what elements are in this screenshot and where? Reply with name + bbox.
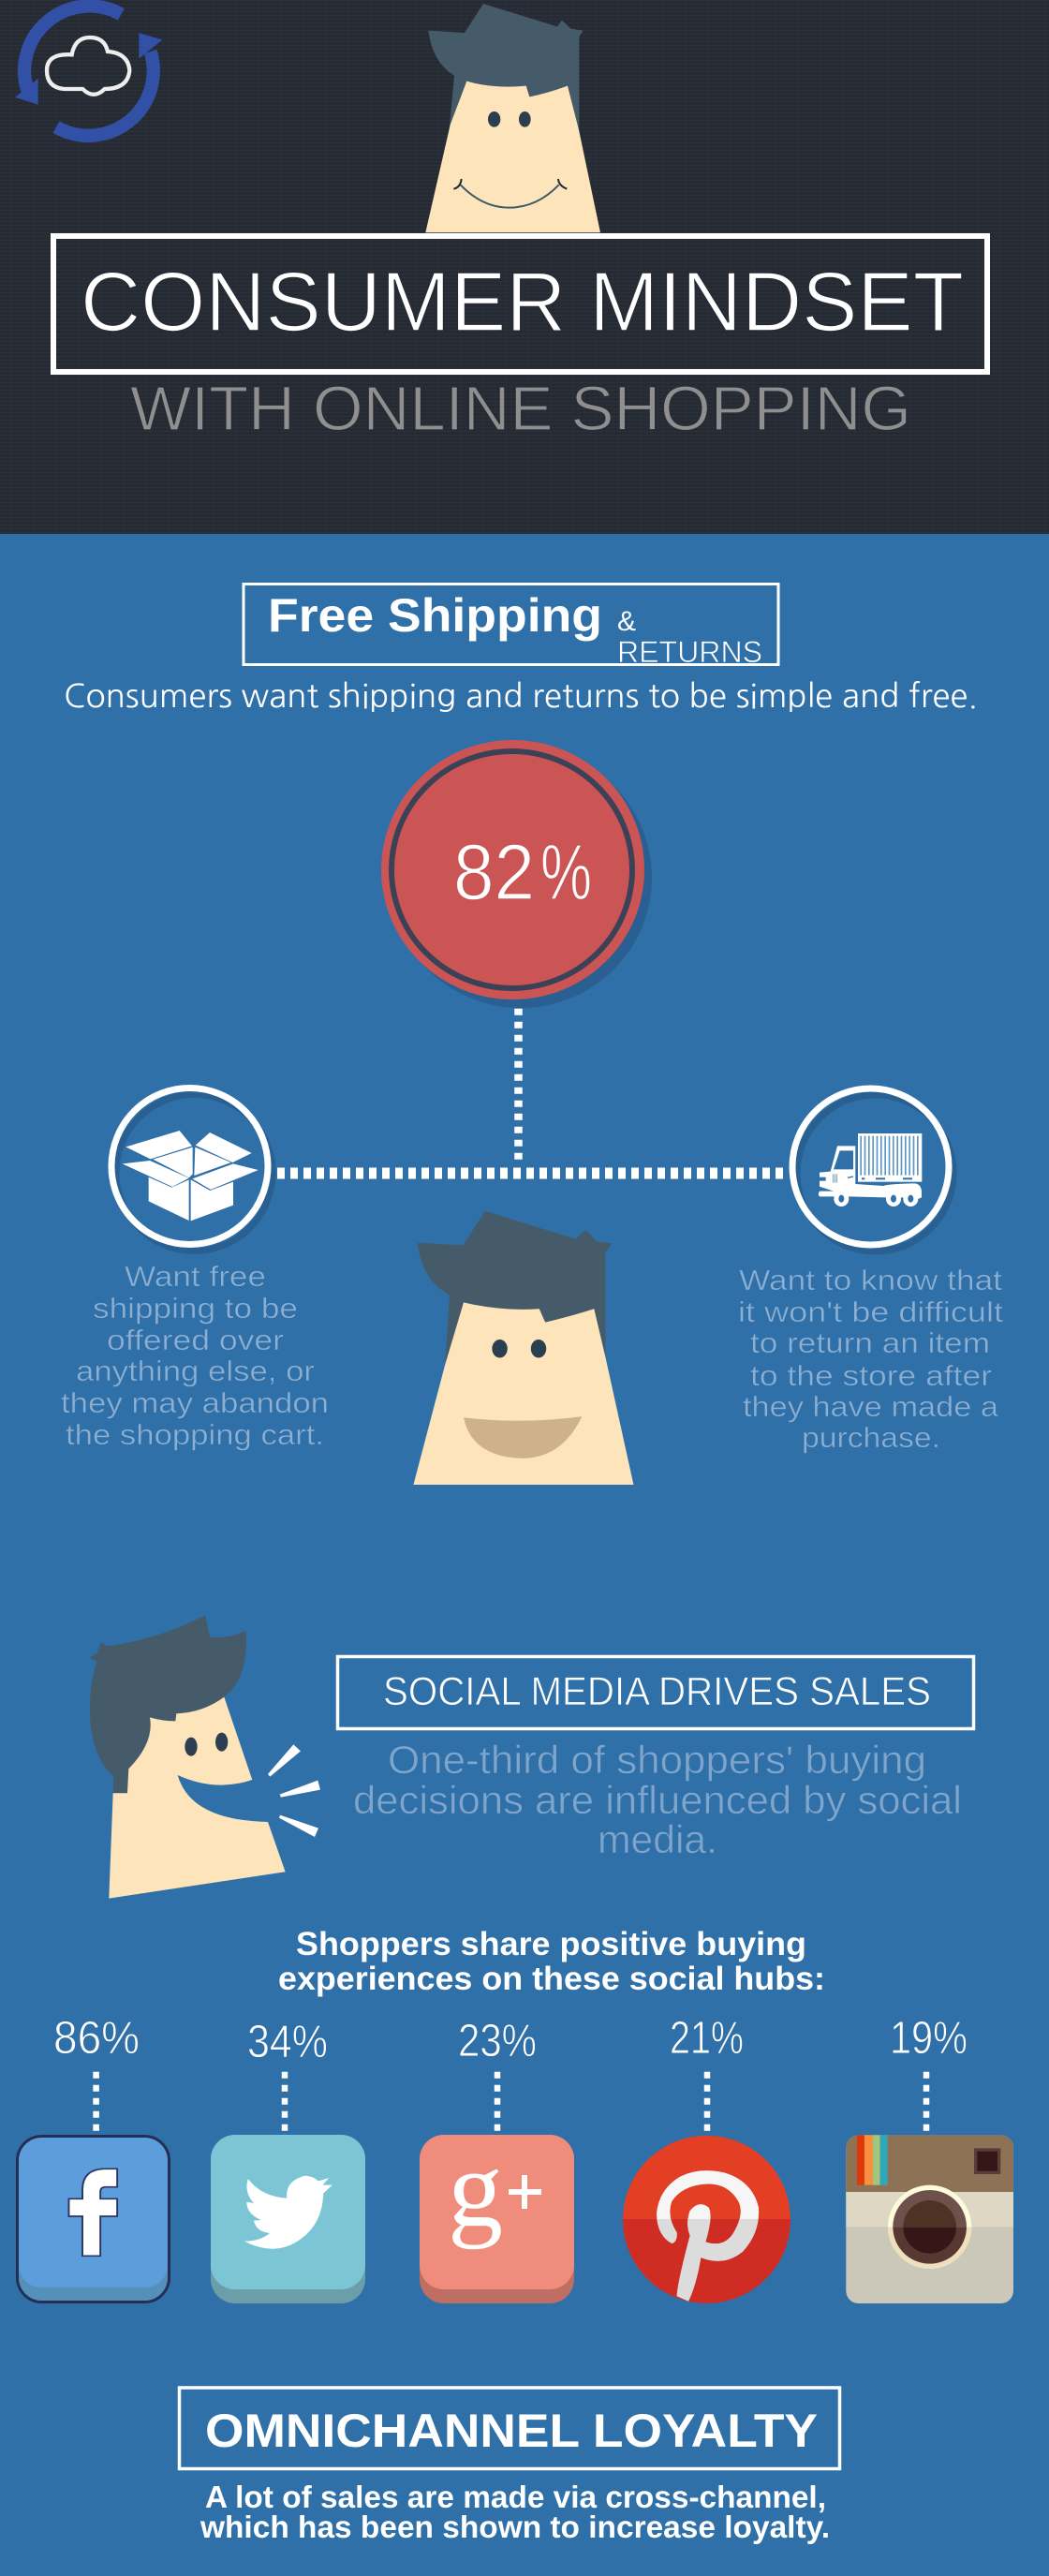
panel: header bbox=[0, 0, 1049, 534]
icon: facebook bbox=[17, 2136, 169, 2302]
icon: delivery truck bbox=[792, 1088, 953, 1251]
text: one third of shoppers: One-third of shoppers' buying bbox=[388, 1738, 926, 1782]
text: want easy returns: Want to know that bbox=[739, 1264, 1002, 1296]
heading: free shipping bbox=[244, 585, 778, 669]
text: one third of shoppers: decisions are influenced by social bbox=[353, 1778, 962, 1822]
heading: free shipping: Free Shipping bbox=[268, 589, 602, 642]
text: one third of shoppers: media. bbox=[598, 1817, 717, 1861]
text: one third of shoppers bbox=[353, 1738, 962, 1861]
title box: CONSUMER MINDSET bbox=[81, 256, 964, 349]
connector: dotted lines bbox=[277, 996, 785, 1173]
text: want free shipping: the shopping cart. bbox=[66, 1418, 324, 1451]
text: want free shipping: offered over bbox=[107, 1324, 284, 1356]
text: omnichannel description bbox=[199, 2480, 830, 2544]
text: social hubs heading: experiences on these social hubs: bbox=[278, 1961, 825, 1997]
panel: social media bbox=[17, 1615, 1013, 2303]
percentages: 23% bbox=[458, 2016, 537, 2066]
icon: shouting man bbox=[89, 1615, 320, 1899]
text: want easy returns bbox=[738, 1264, 1003, 1454]
heading: free shipping: & bbox=[617, 606, 636, 637]
icon: twitter bbox=[211, 2135, 365, 2303]
text: social hubs heading bbox=[278, 1926, 825, 1997]
heading: omnichannel loyalty: OMNICHANNEL LOYALTY bbox=[205, 2405, 818, 2457]
icon: smiling man header bbox=[425, 4, 600, 232]
icon: happy man centre bbox=[413, 1211, 633, 1485]
text: want free shipping: Want free bbox=[125, 1260, 266, 1293]
text: want free shipping: they may abandon bbox=[61, 1386, 329, 1419]
text: social hubs heading: Shoppers share positive buying bbox=[296, 1926, 806, 1962]
stat: 82 percent circle bbox=[381, 740, 652, 1008]
heading: omnichannel loyalty bbox=[180, 2388, 839, 2469]
percentages bbox=[53, 2013, 968, 2067]
text: omnichannel description: A lot of sales are made via cross-channel, bbox=[205, 2480, 826, 2514]
text: want easy returns: to the store after bbox=[750, 1359, 992, 1392]
panel: free shipping bbox=[61, 585, 1003, 1485]
percentages: 86% bbox=[53, 2013, 140, 2064]
text: want free shipping: anything else, or bbox=[76, 1355, 315, 1387]
heading: social media drives sales bbox=[337, 1656, 974, 1729]
text: want easy returns: they have made a bbox=[743, 1390, 999, 1423]
percentages: 19% bbox=[890, 2013, 968, 2064]
icon: pinterest bbox=[623, 2136, 790, 2303]
percentages: 21% bbox=[670, 2013, 744, 2064]
icon: instagram bbox=[846, 2135, 1013, 2303]
stat: 82 percent circle: 82 bbox=[453, 828, 535, 916]
icon: google plus bbox=[420, 2127, 574, 2303]
text: want free shipping: shipping to be bbox=[93, 1292, 298, 1325]
intro text: Consumers want shipping and returns to be simple and free. bbox=[64, 680, 978, 712]
heading: free shipping: RETURNS bbox=[617, 635, 762, 669]
text: want easy returns: purchase. bbox=[802, 1421, 940, 1454]
heading: social media drives sales: SOCIAL MEDIA DRIVES SALES bbox=[383, 1669, 931, 1714]
percentages: 34% bbox=[247, 2017, 328, 2067]
panel: omnichannel loyalty bbox=[180, 2388, 839, 2544]
connector: dotted stems bbox=[96, 2072, 926, 2131]
subtitle: WITH ONLINE SHOPPING bbox=[130, 374, 911, 444]
text: want easy returns: it won't be difficult bbox=[738, 1295, 1003, 1328]
icon: google plus: g bbox=[448, 2127, 503, 2250]
text: want free shipping bbox=[61, 1260, 329, 1451]
text: want easy returns: to return an item bbox=[750, 1326, 990, 1359]
stat: 82 percent circle: % bbox=[540, 828, 592, 916]
icon: cloud sync logo bbox=[15, 6, 162, 136]
title box bbox=[53, 236, 987, 372]
text: omnichannel description: which has been shown to increase loyalty. bbox=[199, 2509, 830, 2544]
icon: open box bbox=[111, 1088, 273, 1251]
